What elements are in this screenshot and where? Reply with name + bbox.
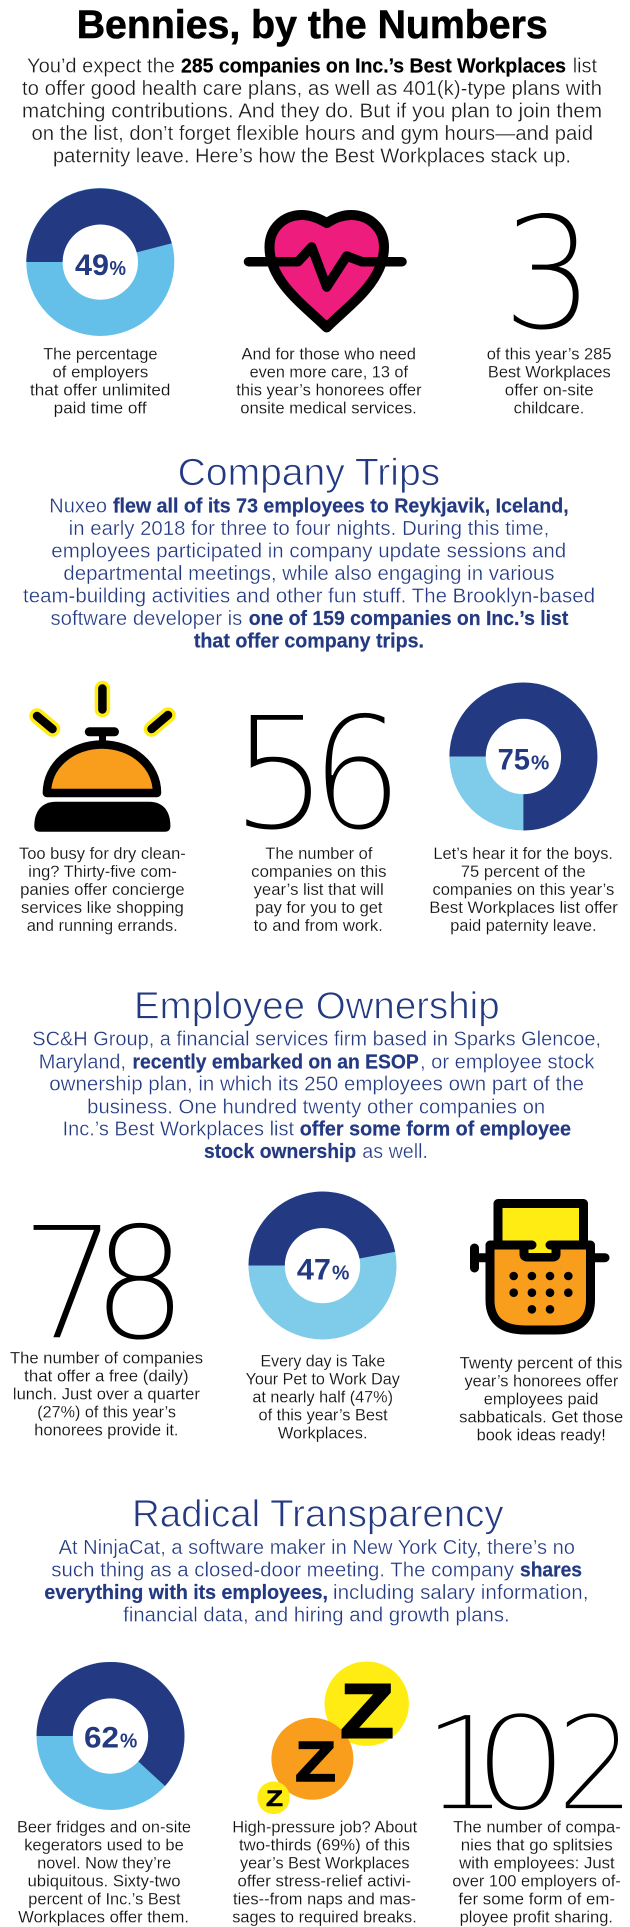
caption: concierge services: ing? Thirty-five com-	[28, 863, 177, 881]
caption: profit sharing: over 100 employers of-	[452, 1872, 621, 1890]
caption: concierge services: services like shopping	[21, 899, 184, 917]
big number: 78: 7	[20, 1193, 118, 1375]
big number: 78	[20, 1193, 188, 1375]
employee ownership text: Inc.’s Best Workplaces list	[63, 1119, 294, 1141]
donut chart: 47%: 47	[297, 1253, 331, 1286]
donut chart: 49%: 49	[75, 249, 109, 282]
caption: paternity leave	[429, 845, 618, 935]
donut chart: 75%: %	[531, 752, 550, 774]
intro text: on the list, don’t forget flexible hours and gym hours—and paid	[32, 123, 593, 145]
caption: stress relief: sages to required breaks.	[232, 1908, 417, 1926]
donut chart: 62%: 62	[84, 1721, 119, 1754]
caption: pets at work: Workplaces.	[278, 1424, 368, 1442]
caption: commuting pay: pay for you to get	[255, 899, 383, 917]
caption: unlimited paid time off	[30, 345, 170, 417]
icon: heart with pulse	[248, 215, 402, 328]
caption: commuting pay: companies on this	[251, 863, 386, 881]
stat row: first	[26, 183, 612, 417]
icon: zzz sleep bubbles: Z	[266, 1786, 283, 1811]
caption: on-site childcare: childcare.	[514, 399, 584, 417]
intro text: You’d expect the	[27, 55, 175, 77]
caption: onsite medical services: even more care, 13 of	[250, 363, 408, 381]
caption: beer fridges: Workplaces offer them.	[18, 1908, 189, 1926]
company trips text: departmental meetings, while also engaging in various	[63, 563, 555, 585]
employee ownership text: business. One hundred twenty other companies on	[87, 1096, 545, 1118]
caption: paternity leave: Let’s hear it for the boys.	[433, 845, 613, 863]
intro text: list	[573, 55, 597, 77]
icon: typewriter	[474, 1204, 605, 1330]
donut chart: 47%: %	[332, 1262, 350, 1284]
caption: pets at work: Every day is Take	[260, 1353, 385, 1371]
icon: service bell	[34, 688, 170, 832]
employee ownership text: Maryland,	[39, 1051, 126, 1073]
caption: commuting pay	[251, 845, 386, 935]
big number: 3: 3	[502, 183, 595, 365]
company trips text: in early 2018 for three to four nights. During this time,	[69, 518, 549, 540]
caption: stress relief: High-pressure job? About	[232, 1818, 418, 1836]
caption: concierge services: Too busy for dry clean-	[19, 845, 186, 863]
icon: zzz sleep bubbles	[257, 1662, 409, 1814]
radical transparency text: At NinjaCat, a software maker in New York City, there’s no	[59, 1537, 575, 1559]
caption: commuting pay: The number of	[265, 845, 373, 863]
caption: on-site childcare	[487, 345, 612, 417]
caption: paid sabbaticals: book ideas ready!	[477, 1427, 606, 1445]
donut chart: 75%: 75	[498, 743, 530, 776]
intro text: 285 companies on Inc.’s Best Workplaces	[181, 55, 566, 77]
employee ownership text: , or employee stock	[420, 1051, 595, 1073]
employee ownership text: as well.	[362, 1141, 428, 1163]
caption: paternity leave: companies on this year’s	[432, 881, 614, 899]
caption: unlimited paid time off: paid time off	[54, 399, 147, 417]
radical transparency text: including salary information,	[333, 1582, 588, 1604]
caption: onsite medical services: And for those who need	[242, 345, 416, 363]
caption: profit sharing: nies that go splitsies	[461, 1836, 613, 1854]
caption: pets at work: Your Pet to Work Day	[246, 1370, 401, 1388]
caption: beer fridges: kegerators used to be	[24, 1836, 184, 1854]
caption: stress relief	[232, 1818, 418, 1926]
caption: concierge services: and running errands.	[27, 917, 178, 935]
panel: company trips	[19, 452, 618, 935]
donut chart: 49%: %	[110, 258, 126, 280]
caption: on-site childcare: offer on-site	[505, 381, 594, 399]
company trips text: that offer company trips.	[194, 630, 424, 652]
big number: 102	[422, 1688, 630, 1840]
radical transparency text: shares	[520, 1560, 582, 1582]
caption: paid sabbaticals: employees paid	[484, 1391, 598, 1409]
company trips text: employees participated in company update sessions and	[51, 540, 566, 562]
caption: free lunch: honorees provide it.	[34, 1421, 178, 1439]
employee ownership text: recently embarked on an ESOP	[132, 1051, 419, 1073]
intro text: to offer good health care plans, as well as 401(k)-type plans with	[22, 78, 602, 100]
caption: paid sabbaticals: sabbaticals. Get those	[459, 1409, 623, 1427]
employee ownership text: SC&H Group, a financial services firm based in Sparks Glencoe,	[32, 1029, 601, 1051]
employee ownership text: offer some form of employee	[300, 1119, 571, 1141]
caption: paternity leave: paid paternity leave.	[450, 917, 596, 935]
caption: stress relief: offer stress-relief activi-	[238, 1872, 411, 1890]
intro text	[22, 55, 602, 167]
caption: onsite medical services: onsite medical services.	[240, 399, 417, 417]
caption: stress relief: ties--from naps and mas-	[233, 1890, 416, 1908]
big number: 102: 0	[472, 1688, 569, 1840]
caption: free lunch: The number of companies	[10, 1349, 203, 1367]
donut chart: 47%	[248, 1192, 395, 1321]
radical transparency text: such thing as a closed-door meeting. The company	[51, 1560, 514, 1582]
donut chart: 75%	[449, 682, 597, 830]
big number: 56	[230, 683, 403, 865]
caption: paid sabbaticals: Twenty percent of this	[460, 1355, 622, 1373]
caption: paternity leave: Best Workplaces list offer	[429, 899, 618, 917]
panel: intro	[22, 3, 602, 167]
caption: paid sabbaticals: year’s honorees offer	[464, 1373, 619, 1391]
caption: beer fridges: novel. Now they’re	[37, 1854, 171, 1872]
donut chart: 49%	[26, 188, 172, 318]
caption: commuting pay: to and from work.	[254, 917, 383, 935]
caption: on-site childcare: Best Workplaces	[488, 363, 611, 381]
caption: onsite medical services: this year’s honorees offer	[236, 381, 422, 399]
big number: 78: 8	[92, 1193, 188, 1375]
caption: pets at work: at nearly half (47%)	[252, 1388, 393, 1406]
caption: concierge services	[19, 845, 186, 935]
caption: beer fridges: ubiquitous. Sixty-two	[28, 1872, 180, 1890]
company trips text	[23, 496, 595, 652]
employee ownership text: stock ownership	[204, 1141, 356, 1163]
caption: paid sabbaticals	[459, 1355, 623, 1445]
caption: free lunch: (27%) of this year’s	[37, 1403, 176, 1421]
donut chart: 62%: %	[120, 1730, 137, 1752]
icon: zzz sleep bubbles: Z	[340, 1668, 394, 1754]
title: Bennies, by the Numbers	[77, 3, 548, 47]
caption: unlimited paid time off: The percentage	[43, 345, 158, 363]
radical transparency text	[44, 1537, 588, 1627]
company trips text: software developer is	[50, 608, 242, 630]
heading: radical transparency: Radical Transparency	[132, 1494, 504, 1536]
company trips text: one of 159 companies on Inc.’s list	[249, 608, 569, 630]
donut chart: 62%	[36, 1662, 184, 1792]
intro text: matching contributions. And they do. But if you plan to join them	[22, 100, 602, 122]
big number: 56: 5	[230, 683, 329, 865]
company trips text: team-building activities and other fun stuff. The Brooklyn-based	[23, 585, 595, 607]
employee ownership text: ownership plan, in which its 250 employees own part of the	[49, 1074, 584, 1096]
caption: profit sharing: ployee profit sharing.	[460, 1908, 613, 1926]
caption: free lunch: lunch. Just over a quarter	[13, 1385, 200, 1403]
caption: onsite medical services	[236, 345, 422, 417]
caption: beer fridges: Beer fridges and on-site	[17, 1818, 191, 1836]
intro text: paternity leave. Here’s how the Best Workplaces stack up.	[53, 145, 571, 167]
big number: 102: 1	[422, 1688, 509, 1840]
employee ownership text	[32, 1029, 601, 1163]
panel: employee ownership	[10, 985, 623, 1445]
company trips text: flew all of its 73 employees to Reykjavik, Iceland,	[113, 496, 569, 518]
caption: profit sharing	[452, 1818, 621, 1926]
caption: free lunch: that offer a free (daily)	[24, 1367, 189, 1385]
caption: beer fridges: percent of Inc.’s Best	[28, 1890, 181, 1908]
caption: paternity leave: 75 percent of the	[461, 863, 586, 881]
caption: pets at work: of this year’s Best	[258, 1406, 388, 1424]
caption: profit sharing: The number of compa-	[453, 1818, 621, 1836]
caption: pets at work	[246, 1353, 401, 1442]
caption: unlimited paid time off: that offer unlimited	[30, 381, 170, 399]
caption: stress relief: two-thirds (69%) of this	[239, 1836, 410, 1854]
caption: on-site childcare: of this year’s 285	[487, 345, 612, 363]
caption: unlimited paid time off: of employers	[52, 363, 148, 381]
caption: concierge services: panies offer concierge	[20, 881, 185, 899]
caption: profit sharing: with employees: Just	[458, 1854, 615, 1872]
radical transparency text: everything with its employees,	[44, 1582, 328, 1604]
caption: beer fridges	[17, 1818, 191, 1926]
heading: employee ownership: Employee Ownership	[134, 985, 500, 1027]
caption: profit sharing: fer some form of em-	[458, 1890, 615, 1908]
big number: 56: 6	[311, 683, 403, 865]
icon: zzz sleep bubbles: Z	[295, 1730, 336, 1794]
radical transparency text: financial data, and hiring and growth plans.	[123, 1605, 510, 1627]
company trips text: Nuxeo	[49, 496, 107, 518]
caption: stress relief: year’s Best Workplaces	[240, 1854, 410, 1872]
caption: free lunch	[10, 1349, 203, 1439]
heading: company trips: Company Trips	[178, 452, 440, 494]
caption: commuting pay: year’s list that will	[254, 881, 384, 899]
panel: radical transparency	[17, 1494, 630, 1926]
